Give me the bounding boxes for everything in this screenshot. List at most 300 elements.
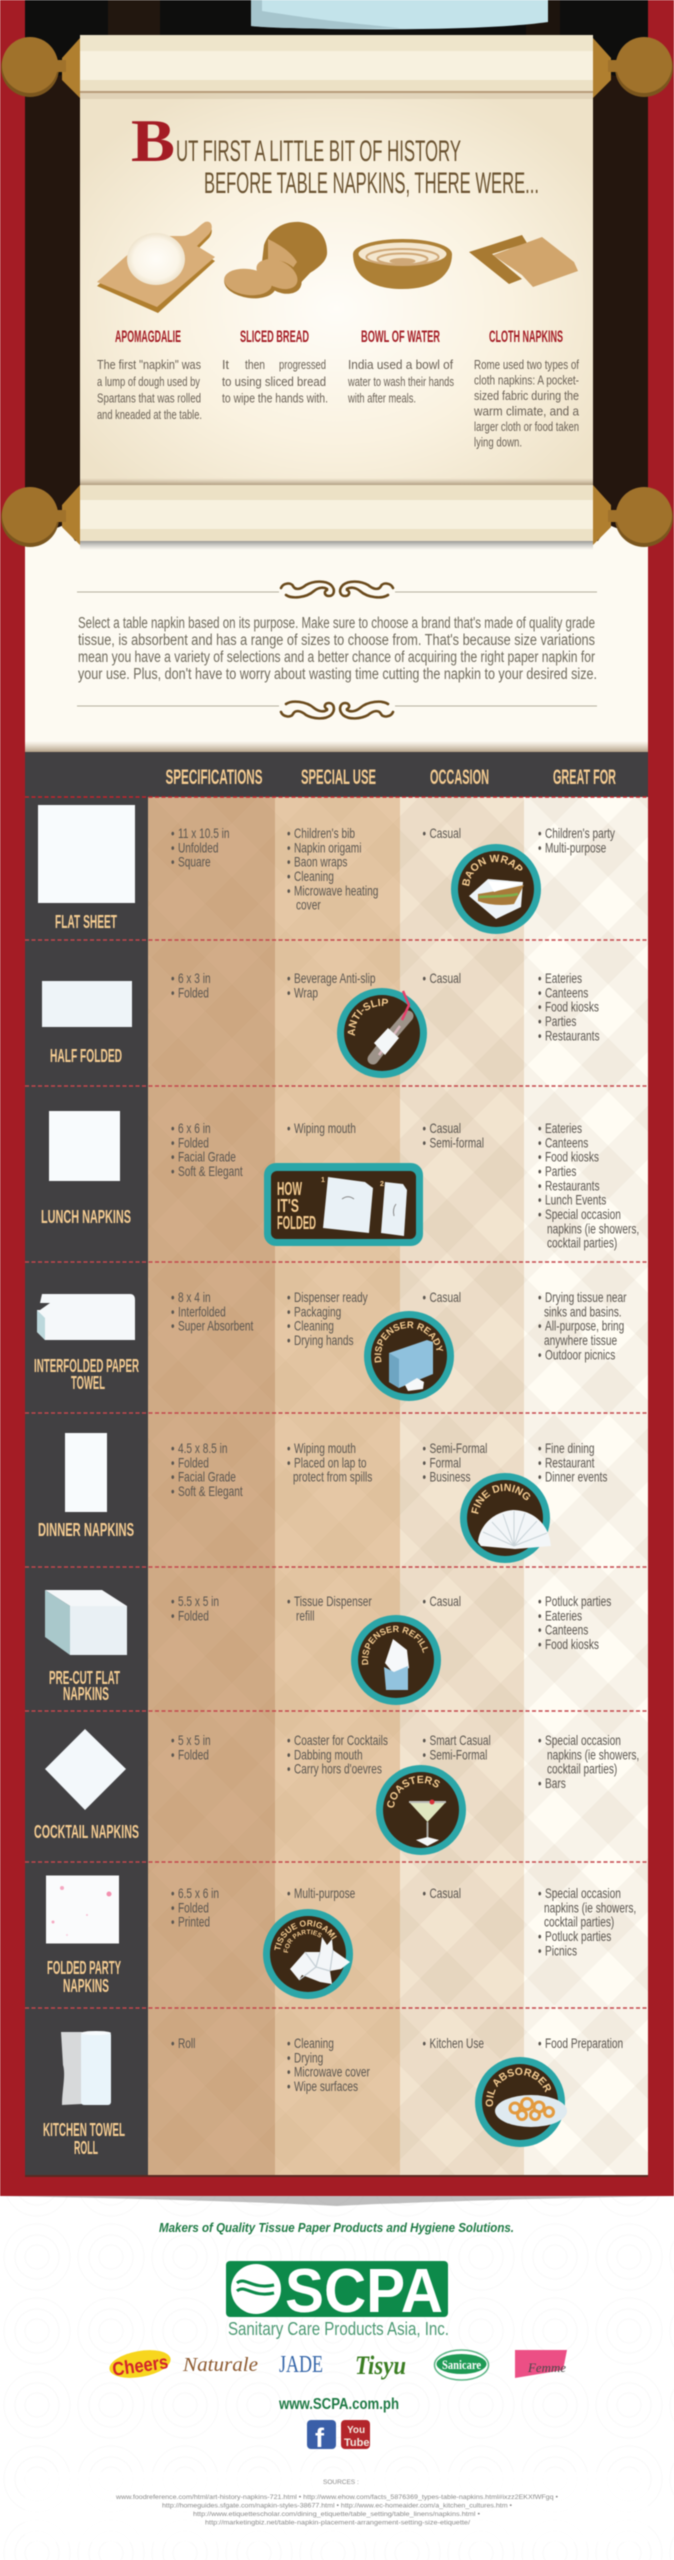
label: pre-cut flat napkins: PRE-CUT FLAT bbox=[49, 1668, 120, 1688]
callout: how it's folded: 1 bbox=[321, 1177, 325, 1184]
badge: anti-slip: ANTI-SLIP bbox=[347, 998, 389, 1036]
row: cocktail napkins bbox=[34, 1728, 639, 1856]
great for: Canteens bbox=[545, 985, 588, 1001]
scroll paper body bbox=[80, 92, 593, 485]
great for: Canteens bbox=[545, 1622, 588, 1638]
great for: • bbox=[538, 1207, 542, 1222]
special use: Baon wraps bbox=[294, 854, 347, 870]
icon: lunch napkin bbox=[49, 1111, 120, 1181]
special use: • bbox=[287, 1318, 291, 1334]
red closing band bbox=[0, 2175, 674, 2196]
specifications: • bbox=[171, 1594, 175, 1609]
callout: how it's folded bbox=[264, 1163, 423, 1246]
row: dinner napkins bbox=[38, 1432, 608, 1564]
table header: OCCASION bbox=[430, 766, 489, 789]
special use: Dispenser ready bbox=[294, 1290, 368, 1305]
special use: • bbox=[287, 1733, 291, 1748]
specifications: • bbox=[171, 1149, 175, 1165]
website: www.SCPA.com.ph bbox=[278, 2396, 399, 2413]
great for: • bbox=[538, 1469, 542, 1485]
specifications: Folded bbox=[178, 1747, 209, 1763]
specifications: 6 x 3 in bbox=[178, 971, 211, 986]
table header bbox=[166, 766, 616, 789]
great for: napkins (ie showers, bbox=[544, 1900, 636, 1916]
badge: tissue origami: TISSUE ORIGAMI bbox=[274, 1919, 338, 1951]
special use: • bbox=[287, 1121, 291, 1136]
great for: • bbox=[538, 1164, 542, 1179]
column: sliced bread: progressed bbox=[279, 358, 326, 372]
label: lunch napkins: LUNCH NAPKINS bbox=[41, 1207, 131, 1227]
special use: Placed on lap to bbox=[294, 1455, 367, 1471]
specifications: Folded bbox=[178, 1900, 209, 1916]
label: dinner napkins: DINNER NAPKINS bbox=[38, 1520, 134, 1540]
icon: youtube: Tube bbox=[344, 2437, 369, 2449]
specifications: • bbox=[171, 826, 175, 841]
icon: cocktail napkin bbox=[45, 1729, 126, 1810]
callout: how it's folded: FOLDED bbox=[277, 1213, 316, 1233]
label: kitchen towel roll bbox=[43, 2120, 125, 2158]
special use: • bbox=[287, 2064, 291, 2080]
great for: • bbox=[538, 1318, 542, 1334]
column: cloth napkins: cloth napkins: A pocket- bbox=[474, 374, 579, 388]
great for: • bbox=[538, 1886, 542, 1901]
column: bowl of water bbox=[347, 327, 454, 406]
sources: http://www.etiquettescholar.com/dining_etiquette/table_setting/table_linens/napkins.html • bbox=[193, 2511, 481, 2518]
special use: Wiping mouth bbox=[294, 1121, 356, 1136]
great for: cocktail parties) bbox=[547, 1761, 617, 1777]
specifications: • bbox=[171, 1318, 175, 1334]
great for: • bbox=[538, 1290, 542, 1305]
column: apomagdalie bbox=[97, 327, 202, 422]
great for: Drying tissue near bbox=[545, 1290, 627, 1305]
occasion: Semi-Formal bbox=[429, 1441, 487, 1456]
great for: Children's party bbox=[545, 826, 615, 841]
panel: intro paragraph bbox=[77, 582, 597, 718]
great for: Food kiosks bbox=[545, 1637, 599, 1652]
badge: tissue origami: FOR PARTIES bbox=[282, 1928, 322, 1954]
table column backgrounds bbox=[25, 752, 648, 2175]
great for: Fine dining bbox=[545, 1441, 594, 1456]
icon: party napkin bbox=[46, 1876, 119, 1944]
column: bowl of water: with after meals. bbox=[347, 392, 416, 406]
special use: • bbox=[287, 2050, 291, 2066]
great for: napkins (ie showers, bbox=[547, 1221, 639, 1237]
great for: Food kiosks bbox=[545, 999, 599, 1015]
column: apomagdalie: a lump of dough used by bbox=[97, 375, 201, 389]
label: kitchen towel roll: KITCHEN TOWEL bbox=[43, 2120, 125, 2140]
column: cloth napkins: sized fabric during the bbox=[474, 389, 579, 403]
column: apomagdalie: Spartans that was rolled bbox=[97, 392, 201, 406]
great for: • bbox=[538, 1637, 542, 1652]
great for: Restaurant bbox=[545, 1455, 595, 1471]
logo: sanicare: Sanicare bbox=[442, 2357, 481, 2372]
icon: cloth napkins bbox=[469, 235, 578, 287]
column: sliced bread bbox=[222, 327, 328, 406]
special use: • bbox=[287, 1747, 291, 1763]
special use: • bbox=[287, 1886, 291, 1901]
special use: Children's bib bbox=[294, 826, 355, 841]
great for: Multi-purpose bbox=[545, 840, 607, 856]
specifications: • bbox=[171, 1608, 175, 1624]
label: cocktail napkins: COCKTAIL NAPKINS bbox=[34, 1822, 139, 1842]
row: lunch napkins bbox=[41, 1111, 639, 1251]
specifications: • bbox=[171, 1747, 175, 1763]
sources bbox=[115, 2479, 559, 2526]
special use: • bbox=[287, 1455, 291, 1471]
company name: Sanitary Care Products Asia, Inc. bbox=[228, 2319, 449, 2339]
badge: fine dining bbox=[459, 1472, 551, 1564]
great for: Lunch Events bbox=[545, 1192, 606, 1208]
specifications: 5 x 5 in bbox=[178, 1733, 211, 1748]
great for: • bbox=[538, 1929, 542, 1944]
label: interfolded paper towel: INTERFOLDED PAPER bbox=[34, 1356, 139, 1376]
badge: fine dining: FINE DINING bbox=[470, 1482, 531, 1515]
special use: Microwave heating bbox=[294, 883, 378, 899]
great for: Outdoor picnics bbox=[545, 1347, 615, 1363]
column: apomagdalie: APOMAGDALIE bbox=[115, 327, 181, 346]
icon: youtube: You bbox=[347, 2425, 365, 2436]
special use: • bbox=[287, 840, 291, 856]
bottom ornament divider bbox=[77, 702, 597, 718]
label: folded party napkins: FOLDED PARTY bbox=[47, 1958, 121, 1978]
occasion: Casual bbox=[429, 1886, 461, 1901]
icon: youtube bbox=[341, 2420, 370, 2449]
great for: Picnics bbox=[545, 1943, 577, 1959]
heading: UT FIRST A LITTLE BIT OF HISTORY bbox=[176, 135, 461, 168]
badge: baon wrap bbox=[450, 843, 542, 935]
special use: Multi-purpose bbox=[294, 1886, 356, 1901]
sources: SOURCES : bbox=[323, 2479, 359, 2486]
great for: Eateries bbox=[545, 1608, 582, 1624]
logo: jade: JADE bbox=[279, 2352, 323, 2378]
occasion: Business bbox=[429, 1469, 471, 1485]
column: cloth napkins: lying down. bbox=[474, 436, 522, 450]
great for: Special occasion bbox=[545, 1886, 621, 1901]
great for: • bbox=[538, 985, 542, 1001]
occasion: Casual bbox=[429, 1290, 461, 1305]
column: apomagdalie: and kneaded at the table. bbox=[97, 408, 202, 422]
great for: • bbox=[538, 826, 542, 841]
specifications: 8 x 4 in bbox=[178, 1290, 211, 1305]
specifications: 5.5 x 5 in bbox=[178, 1594, 219, 1609]
column: sliced bread: SLICED BREAD bbox=[240, 327, 309, 346]
specifications: Roll bbox=[178, 2036, 195, 2051]
icon: facebook: f bbox=[315, 2423, 325, 2453]
label: interfolded paper towel bbox=[34, 1356, 139, 1393]
tagline: Makers of Quality Tissue Paper Products and Hygiene Solutions. bbox=[159, 2220, 514, 2235]
specifications: Facial Grade bbox=[178, 1149, 236, 1165]
logo: femme bbox=[515, 2350, 567, 2378]
great for: Parties bbox=[545, 1014, 577, 1029]
column: sliced bread: to wipe the hands with. bbox=[222, 392, 328, 406]
icon: dough on board bbox=[97, 222, 215, 313]
specifications: 4.5 x 8.5 in bbox=[178, 1441, 227, 1456]
great for: • bbox=[538, 1733, 542, 1748]
specifications: Soft & Elegant bbox=[178, 1484, 243, 1499]
great for: sinks and basins. bbox=[544, 1304, 622, 1320]
column: cloth napkins: warm climate, and a bbox=[473, 404, 579, 418]
top roller bbox=[80, 35, 593, 99]
special use: • bbox=[287, 854, 291, 870]
sources: http://marketingbiz.net/table-napkin-placement-arrangement-setting-size-etiquette/ bbox=[205, 2520, 470, 2526]
great for: • bbox=[538, 1135, 542, 1151]
label: flat sheet: FLAT SHEET bbox=[55, 912, 117, 932]
special use: cover bbox=[296, 897, 321, 913]
great for: • bbox=[538, 1149, 542, 1165]
row: pre-cut flat napkins bbox=[44, 1589, 612, 1706]
callout: how it's folded: HOW bbox=[277, 1179, 302, 1199]
special use: • bbox=[287, 971, 291, 986]
column: apomagdalie: The first "napkin" was bbox=[97, 358, 201, 372]
great for: Potluck parties bbox=[545, 1594, 611, 1609]
occasion: • bbox=[422, 971, 426, 986]
specifications: • bbox=[171, 1484, 175, 1499]
badge: oil absorber bbox=[474, 2056, 567, 2148]
great for: • bbox=[538, 1028, 542, 1044]
great for: • bbox=[538, 2036, 542, 2051]
special use: • bbox=[287, 883, 291, 899]
great for: • bbox=[538, 1178, 542, 1194]
column: bowl of water: water to wash their hands bbox=[347, 375, 454, 389]
sources: http://homeguides.sfgate.com/napkin-styles-38677.html • http://www.ec-homeaider.com/a_kitchen_cultures.htm • bbox=[162, 2502, 513, 2510]
column: sliced bread: to using sliced bread bbox=[222, 375, 326, 389]
specifications: • bbox=[171, 2036, 175, 2051]
special use: • bbox=[287, 869, 291, 884]
label: folded party napkins bbox=[47, 1958, 121, 1996]
row: folded party napkins bbox=[45, 1874, 636, 2000]
table header: SPECIAL USE bbox=[301, 766, 376, 789]
cream area below scroll bbox=[25, 541, 648, 752]
label: half folded: HALF FOLDED bbox=[50, 1046, 122, 1066]
occasion: • bbox=[422, 1594, 426, 1609]
specifications: Unfolded bbox=[178, 840, 219, 856]
special use: • bbox=[287, 1333, 291, 1348]
special use: Microwave cover bbox=[294, 2064, 370, 2080]
panel: comparison table bbox=[24, 751, 649, 2176]
bottom roller bbox=[80, 478, 593, 550]
occasion: Semi-Formal bbox=[429, 1747, 487, 1763]
specifications: • bbox=[171, 854, 175, 870]
SCPA logo: SCPA bbox=[285, 2257, 443, 2326]
column: bowl of water: BOWL OF WATER bbox=[361, 327, 440, 346]
column: cloth napkins: larger cloth or food taken bbox=[474, 420, 579, 434]
specifications: Interfolded bbox=[178, 1304, 226, 1320]
panel: history scroll bbox=[1, 35, 673, 550]
special use: Napkin origami bbox=[294, 840, 361, 856]
great for: All-purpose, bring bbox=[545, 1318, 624, 1334]
icon: interfolded towel bbox=[37, 1294, 135, 1340]
sources: www.foodreference.com/html/art-history-napkins-721.html • http://www.ehow.com/facts_5876369_types-table-napkins.html#ixzz2EKXfWFgq • bbox=[115, 2494, 559, 2501]
great for: Restaurants bbox=[545, 1028, 600, 1044]
occasion: Kitchen Use bbox=[429, 2036, 484, 2051]
occasion: • bbox=[422, 1747, 426, 1763]
occasion: • bbox=[422, 2036, 426, 2051]
icon: sliced bread bbox=[222, 222, 327, 301]
icon: kitchen roll bbox=[61, 2031, 111, 2105]
heading: B bbox=[131, 108, 175, 174]
specifications: Facial Grade bbox=[178, 1469, 236, 1485]
occasion: • bbox=[422, 826, 426, 841]
specifications: • bbox=[171, 1290, 175, 1305]
specifications: • bbox=[171, 1900, 175, 1916]
occasion: • bbox=[422, 1469, 426, 1485]
special use: Drying bbox=[294, 2050, 323, 2066]
logo: naturale: Naturale bbox=[182, 2354, 258, 2376]
great for: • bbox=[538, 1622, 542, 1638]
occasion: Casual bbox=[429, 1594, 461, 1609]
column: cloth napkins: Rome used two types of bbox=[474, 358, 579, 372]
specifications: Folded bbox=[178, 1455, 209, 1471]
great for: • bbox=[538, 1121, 542, 1136]
great for: • bbox=[538, 1776, 542, 1791]
icon: facebook bbox=[307, 2420, 336, 2453]
label: folded party napkins: NAPKINS bbox=[63, 1976, 109, 1996]
special use: • bbox=[287, 2036, 291, 2051]
specifications: • bbox=[171, 1733, 175, 1748]
specifications: • bbox=[171, 1455, 175, 1471]
special use: • bbox=[287, 2079, 291, 2094]
logo: sanicare bbox=[434, 2350, 488, 2380]
column: sliced bread: It bbox=[222, 358, 229, 372]
great for: Parties bbox=[545, 1164, 577, 1179]
row: kitchen towel roll bbox=[42, 2030, 624, 2158]
occasion: • bbox=[422, 1455, 426, 1471]
special use: Carry hors d'oevres bbox=[294, 1761, 382, 1777]
special use: • bbox=[287, 1290, 291, 1305]
badge: dispenser refill bbox=[350, 1614, 442, 1706]
great for: Restaurants bbox=[545, 1178, 600, 1194]
specifications: • bbox=[171, 1304, 175, 1320]
occasion: • bbox=[422, 1135, 426, 1151]
specifications: • bbox=[171, 1164, 175, 1179]
specifications: 6 x 6 in bbox=[178, 1121, 211, 1136]
intro text bbox=[78, 615, 597, 683]
special use: • bbox=[287, 826, 291, 841]
special use: Dabbing mouth bbox=[294, 1747, 363, 1763]
special use: Wiping mouth bbox=[294, 1441, 356, 1456]
occasion: Smart Casual bbox=[429, 1733, 491, 1748]
great for: Special occasion bbox=[545, 1733, 621, 1748]
footer background bbox=[0, 2196, 674, 2560]
icon: napkin stack bbox=[45, 1590, 127, 1655]
special use: Drying hands bbox=[294, 1333, 354, 1348]
heading bbox=[131, 108, 539, 200]
specifications: • bbox=[171, 1121, 175, 1136]
occasion: • bbox=[422, 1441, 426, 1456]
specifications: • bbox=[171, 971, 175, 986]
occasion: • bbox=[422, 1733, 426, 1748]
great for: anywhere tissue bbox=[544, 1333, 617, 1348]
row: flat sheet bbox=[37, 804, 616, 935]
great for: • bbox=[538, 1347, 542, 1363]
table header: SPECIFICATIONS bbox=[166, 766, 262, 789]
great for: • bbox=[538, 1455, 542, 1471]
specifications: Printed bbox=[178, 1914, 210, 1930]
specifications: 6.5 x 6 in bbox=[178, 1886, 219, 1901]
badge: oil absorber: OIL ABSORBER bbox=[485, 2066, 552, 2108]
great for: • bbox=[538, 840, 542, 856]
occasion: • bbox=[422, 1290, 426, 1305]
special use: Wrap bbox=[294, 985, 318, 1001]
specifications: • bbox=[171, 1469, 175, 1485]
row separators bbox=[25, 797, 648, 2008]
badge: coasters bbox=[375, 1764, 467, 1856]
logo: femme: Femme bbox=[527, 2360, 566, 2375]
great for: Eateries bbox=[545, 971, 582, 986]
icon: half folded bbox=[42, 981, 132, 1027]
dark curtain backdrop bbox=[25, 0, 648, 545]
row: interfolded paper towel bbox=[34, 1290, 627, 1402]
badge: dispenser refill: DISPENSER REFILL bbox=[361, 1625, 428, 1666]
label: pre-cut flat napkins: NAPKINS bbox=[63, 1684, 109, 1704]
great for: Food Preparation bbox=[545, 2036, 623, 2051]
row: half folded bbox=[41, 971, 600, 1079]
badge: anti-slip bbox=[336, 987, 428, 1079]
great for: Potluck parties bbox=[545, 1929, 611, 1944]
great for: • bbox=[538, 1441, 542, 1456]
great for: Dinner events bbox=[545, 1469, 607, 1485]
specifications: • bbox=[171, 985, 175, 1001]
wooden knobs bbox=[1, 37, 673, 547]
great for: • bbox=[538, 1192, 542, 1208]
icon: dinner napkin bbox=[65, 1433, 107, 1512]
badge: coasters: COASTERS bbox=[386, 1775, 440, 1808]
column: cloth napkins bbox=[473, 327, 579, 450]
specifications: Super Absorbent bbox=[178, 1318, 254, 1334]
specifications: Square bbox=[178, 854, 211, 870]
great for: • bbox=[538, 971, 542, 986]
great for: • bbox=[538, 1594, 542, 1609]
specifications: • bbox=[171, 840, 175, 856]
specifications: 11 x 10.5 in bbox=[178, 826, 230, 841]
specifications: • bbox=[171, 1914, 175, 1930]
special use: Coaster for Cocktails bbox=[294, 1733, 388, 1748]
top ornament divider bbox=[77, 582, 597, 597]
special use: • bbox=[287, 1761, 291, 1777]
specifications: • bbox=[171, 1441, 175, 1456]
great for: • bbox=[538, 1943, 542, 1959]
great for: • bbox=[538, 999, 542, 1015]
scroll bottom curtain notches bbox=[25, 525, 648, 548]
great for: Special occasion bbox=[545, 1207, 621, 1222]
specifications: • bbox=[171, 1135, 175, 1151]
great for: Canteens bbox=[545, 1135, 588, 1151]
specifications: • bbox=[171, 1886, 175, 1901]
special use: Beverage Anti-slip bbox=[294, 971, 376, 986]
callout: how it's folded: 2 bbox=[380, 1181, 384, 1188]
label: interfolded paper towel: TOWEL bbox=[71, 1373, 105, 1393]
great for: • bbox=[538, 1014, 542, 1029]
special use: • bbox=[287, 1441, 291, 1456]
occasion: Casual bbox=[429, 826, 461, 841]
label: pre-cut flat napkins bbox=[49, 1668, 120, 1704]
special use: • bbox=[287, 985, 291, 1001]
shadow above table bbox=[25, 741, 648, 752]
column: cloth napkins: CLOTH NAPKINS bbox=[489, 327, 563, 346]
specifications: Folded bbox=[178, 1608, 209, 1624]
logo: cheers: Cheers bbox=[111, 2352, 170, 2381]
special use: Packaging bbox=[294, 1304, 341, 1320]
special use: refill bbox=[296, 1608, 315, 1624]
occasion: Casual bbox=[429, 971, 461, 986]
callout: how it's folded: IT'S bbox=[277, 1196, 299, 1216]
great for: Bars bbox=[545, 1776, 566, 1791]
great for: napkins (ie showers, bbox=[547, 1747, 639, 1763]
special use: • bbox=[287, 1594, 291, 1609]
table header: GREAT FOR bbox=[553, 766, 616, 789]
special use: Tissue Dispenser bbox=[294, 1594, 372, 1609]
great for: cocktail parties) bbox=[547, 1235, 617, 1251]
